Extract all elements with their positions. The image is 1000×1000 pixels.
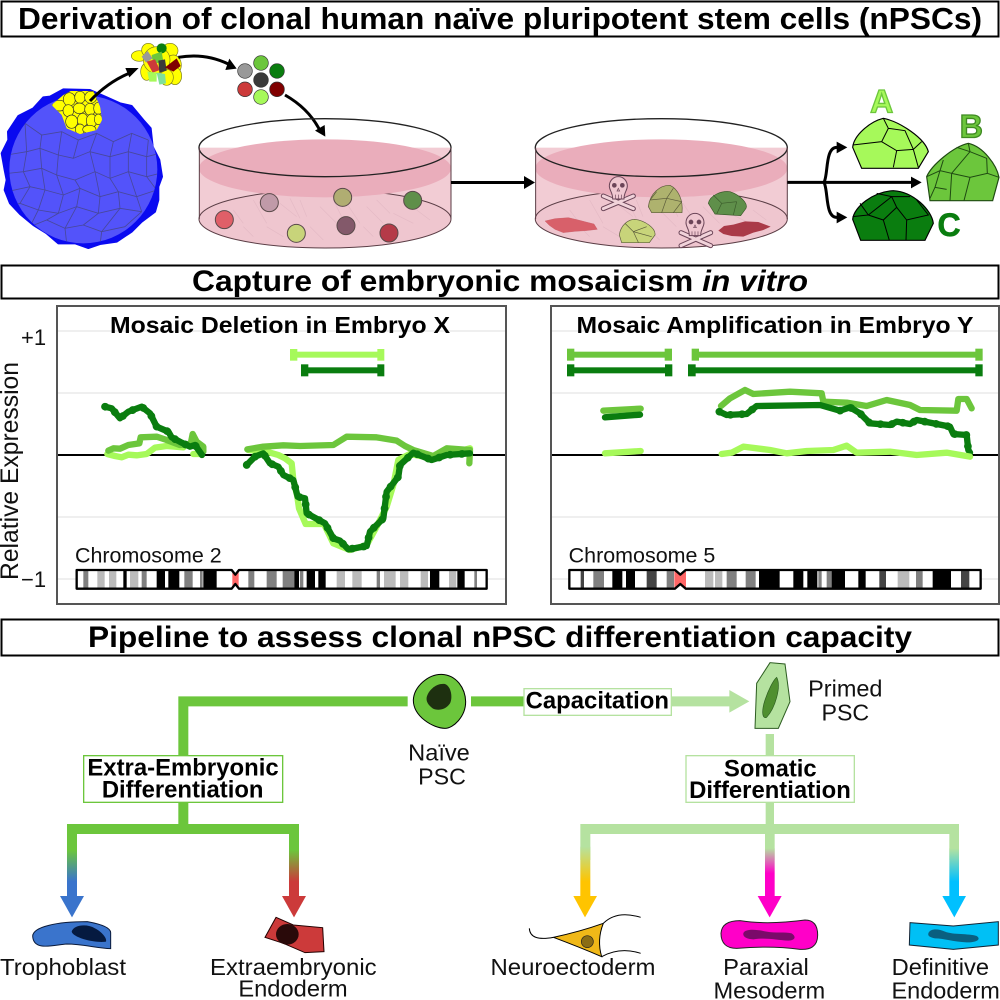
icon: culture dish with seeded cells (199, 119, 451, 248)
icon: clone colony B: B (960, 108, 983, 144)
icon: dissociated single cells (238, 56, 284, 104)
icon: primed PSC cell (755, 663, 790, 728)
label: definitive endoderm: Definitive (892, 954, 989, 980)
arrow: dish to dish (451, 176, 535, 189)
label box: extra-embryonic differentiation: Differentiation (102, 777, 263, 803)
icon: clone colony A (853, 84, 928, 168)
chromosome 5 ideogram (569, 545, 981, 589)
label: definitive endoderm (891, 954, 1000, 1000)
clone range bars (567, 349, 983, 376)
panel: mosaic deletion chart (57, 306, 506, 604)
label: primed PSC: Primed (808, 676, 882, 702)
arrow: branching to clones (787, 142, 922, 223)
heading: capture of mosaicism (2, 265, 998, 298)
label: paraxial mesoderm (713, 954, 825, 1000)
chromosome 2 ideogram: Chromosome 2 (75, 545, 222, 568)
label: extraembryonic endoderm: Extraembryonic (210, 954, 377, 980)
title: derivation: Derivation of clonal human naïve pluripotent stem cells (nPSCs) (18, 2, 982, 36)
y-axis label: relative expression: −1 (21, 567, 46, 592)
label box: somatic differentiation (686, 756, 854, 804)
label box: extra-embryonic differentiation (84, 756, 283, 803)
icon: definitive endoderm cell (909, 922, 998, 949)
label box: somatic differentiation: Somatic (724, 756, 817, 782)
label: primed PSC: PSC (821, 700, 869, 726)
panel: mosaic amplification chart (551, 306, 999, 604)
expression traces (603, 390, 972, 457)
icon: culture dish with selected colonies (535, 119, 787, 248)
y-axis label: relative expression (0, 325, 46, 592)
arrow: single cells to dish (285, 95, 325, 137)
label: neuroectoderm: Neuroectoderm (490, 954, 656, 980)
icon: blastocyst embryo (2, 89, 162, 248)
icon: clone colony C: C (937, 207, 961, 243)
icon: clone colony C (853, 191, 961, 243)
icon: skull and crossbones 2 (681, 213, 711, 246)
label: naive PSC: Naïve (408, 740, 470, 766)
icon: trophoblast cell (33, 922, 111, 949)
icon: naive PSC cell (413, 674, 466, 728)
label: extraembryonic endoderm (210, 954, 377, 1000)
arrows: somatic branch (573, 734, 966, 917)
icon: clone colony B (927, 108, 999, 201)
label: trophoblast: Trophoblast (0, 954, 126, 980)
chromosome 5 ideogram: Chromosome 5 (569, 545, 715, 568)
icon: paraxial mesoderm cell (721, 920, 818, 949)
expression traces (105, 407, 470, 550)
label box: somatic differentiation: Differentiation (689, 778, 851, 804)
chart title: Mosaic Deletion in Embryo X (110, 312, 451, 338)
chart title: Mosaic Amplification in Embryo Y (576, 312, 974, 338)
arrow: embryo to cluster (90, 68, 139, 101)
icon: isolated inner cell mass cluster (131, 43, 182, 85)
arrows: extra-embryonic branch (60, 696, 408, 917)
chromosome 2 ideogram (75, 545, 487, 589)
heading: differentiation pipeline: Pipeline to assess clonal nPSC differentiation capacity (88, 621, 913, 654)
label box: extra-embryonic differentiation: Extra-Embryonic (87, 756, 279, 782)
arrow: capacitation (471, 688, 749, 715)
icon: clone colony A: A (870, 84, 893, 120)
icon: neuroectoderm cell (529, 915, 641, 957)
icon: extraembryonic endoderm cell (265, 917, 324, 953)
label: paraxial mesoderm: Paraxial (723, 954, 809, 980)
clone range bars (290, 349, 384, 376)
label: naive PSC: PSC (418, 763, 466, 789)
arrow: capacitation: Capacitation (526, 688, 669, 714)
heading: capture of mosaicism: Capture of embryonic mosaicism in vitro (192, 265, 808, 298)
label: primed PSC (808, 676, 882, 726)
arrow: cluster to single cells (178, 56, 237, 70)
icon: skull and crossbones 1 (603, 177, 633, 209)
y-axis label: relative expression: +1 (21, 325, 46, 350)
label: naive PSC (408, 740, 470, 789)
